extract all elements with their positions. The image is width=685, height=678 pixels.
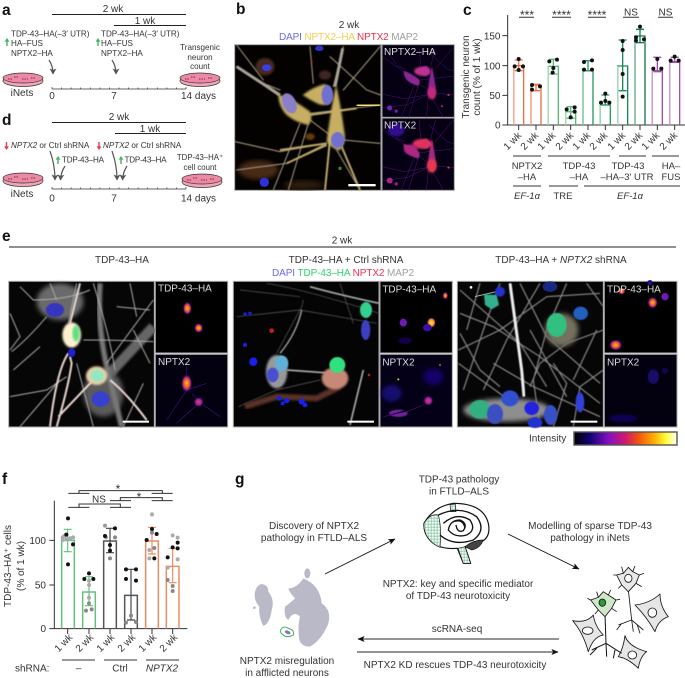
- y tick labels: 150: [484, 32, 501, 42]
- text scRNA-seq: scRNA-seq: [432, 624, 482, 635]
- NPTX2 channel: NPTX2: [384, 120, 417, 131]
- group lines and labels: [512, 156, 681, 202]
- merged micrograph 1: [9, 281, 154, 427]
- label a: a: [2, 2, 11, 19]
- panel g: summary schematic: [235, 471, 668, 678]
- shRNA row: shRNA:: [15, 664, 49, 674]
- significance text: *: [137, 490, 142, 504]
- x tick labels: 2 wk: [554, 130, 577, 153]
- arrows: [50, 151, 127, 180]
- transgene list day 7: NPTX2–HA: [101, 49, 143, 58]
- x tick labels: 1 wk: [571, 130, 594, 153]
- group lines and labels: –HA–3′ UTR: [600, 172, 654, 183]
- panel b: NPTX2-HA images: [235, 1, 454, 190]
- NPTX2-HA channel: NPTX2–HA: [384, 47, 436, 58]
- brain illustration: [424, 503, 489, 563]
- shRNA row: Ctrl: [112, 664, 128, 674]
- y tick labels: [29, 536, 46, 635]
- label b: b: [236, 1, 245, 18]
- x tick labels: 1 wk: [137, 632, 160, 655]
- x tick labels: 2 wk: [623, 130, 646, 153]
- intensity scale: Intensity: [529, 434, 566, 444]
- side channels 1: [155, 281, 228, 427]
- significance marks: ***: [520, 8, 534, 22]
- dish cell count: cell count: [184, 163, 217, 172]
- transgene list day 0: [5, 30, 90, 58]
- x tick labels: 1 wk: [95, 632, 118, 655]
- text discovery: Discovery of NPTX2: [269, 521, 359, 532]
- text mediator: [383, 579, 534, 602]
- y tick labels: 0: [40, 624, 46, 635]
- column titles: TDP-43–HA + NPTX2 shRNA: [495, 255, 627, 266]
- column titles: TDP-43–HA: [95, 255, 149, 266]
- y axis title: (% of 1 wk): [16, 541, 27, 591]
- group lines and labels: HA–: [662, 161, 681, 172]
- group lines and labels: NPTX2: [512, 161, 542, 172]
- transgene list day 0: NPTX2–HA: [11, 49, 53, 58]
- arrow to neurons: [508, 534, 579, 569]
- duration bars: 2 wk: [103, 4, 124, 15]
- channel legend: DAPI TDP-43–HA NPTX2 MAP2: [272, 268, 414, 279]
- transgene list day 7: TDP-43–HA(–3′ UTR): [101, 30, 180, 38]
- text TDP-43 pathology: in FTLD–ALS: [429, 486, 489, 498]
- label c: c: [463, 2, 472, 19]
- side channels 1: TDP-43–HA: [158, 284, 212, 295]
- y axis title: TDP-43–HA⁺ cells: [3, 525, 14, 607]
- NPTX2-HA channel: [382, 45, 454, 118]
- significance text: [92, 482, 142, 506]
- axis days: 7: [111, 194, 117, 204]
- axis days: 14 days: [181, 194, 216, 204]
- dish iNets: [3, 173, 43, 200]
- duration bars: 1 wk: [140, 124, 161, 135]
- significance text: *: [116, 482, 121, 496]
- x tick labels: 1 wk: [640, 130, 663, 153]
- x tick labels: 2 wk: [74, 632, 97, 655]
- group lines and labels: –HA: [570, 172, 589, 183]
- significance marks: NS: [624, 8, 638, 18]
- heading 2 wk: 2 wk: [339, 20, 360, 31]
- y axis title: [3, 525, 27, 607]
- panel c: transgenic neuron count chart: [461, 2, 685, 202]
- shRNA labels: NPTX2 or Ctrl shRNA: [11, 141, 90, 150]
- shRNA labels: NPTX2 or Ctrl shRNA: [103, 141, 182, 150]
- dish cell count: [177, 153, 223, 188]
- x tick labels: 1 wk: [502, 130, 525, 153]
- label g: g: [235, 471, 244, 488]
- y tick labels: 100: [29, 536, 46, 547]
- group lines and labels: FUS: [662, 172, 680, 183]
- transgene list day 0: HA–FUS: [11, 39, 44, 48]
- label d: d: [2, 112, 11, 129]
- group lines and labels: TDP-43: [612, 161, 644, 172]
- text modelling: pathology in iNets: [550, 533, 630, 544]
- significance text: NS: [92, 494, 106, 506]
- intensity scale: [529, 432, 677, 445]
- merged micrograph: [235, 45, 381, 190]
- duration bars: 1 wk: [135, 16, 156, 27]
- transgene list day 7: [96, 30, 180, 58]
- dish transgenic count: neuron: [187, 53, 213, 62]
- y axis title: Transgenic neuron: [461, 35, 472, 119]
- panel d: timeline: [2, 112, 223, 204]
- x tick labels: 2 wk: [116, 632, 139, 655]
- dish cell count: TDP-43–HA⁺: [177, 153, 223, 162]
- group lines and labels: TDP-43: [563, 161, 595, 172]
- label f: f: [2, 471, 8, 488]
- UMAP: [253, 568, 329, 647]
- x tick labels: 2 wk: [519, 130, 542, 153]
- significance marks: ****: [588, 8, 607, 22]
- TDP labels: TDP-43–HA: [62, 156, 105, 164]
- group lines and labels: TRE: [554, 191, 572, 202]
- side channels 2: NPTX2: [382, 358, 415, 369]
- group lines and labels: EF-1α: [617, 191, 644, 202]
- y tick labels: 100: [484, 62, 501, 72]
- transgene list day 7: HA–FUS: [101, 39, 134, 48]
- dish iNets: [3, 73, 43, 99]
- text modelling: Modelling of sparse TDP-43: [528, 521, 652, 532]
- side channels 3: TDP-43–HA: [607, 285, 661, 296]
- text TDP-43 pathology: [419, 474, 499, 498]
- axis days: [49, 187, 216, 204]
- text KD rescue: NPTX2 KD rescues TDP-43 neurotoxicity: [364, 660, 546, 671]
- x tick labels: 1 wk: [606, 130, 629, 153]
- heading 2 wk: 2 wk: [332, 236, 353, 246]
- y tick labels: 50: [489, 91, 501, 102]
- y tick labels: 50: [35, 580, 46, 592]
- significance marks: ****: [552, 8, 571, 22]
- text discovery: pathology in FTLD–ALS: [261, 533, 367, 544]
- side channels 2: TDP-43–HA: [382, 285, 436, 296]
- axis days: 7: [111, 91, 117, 102]
- x tick labels: 2 wk: [658, 130, 681, 153]
- channel legend: DAPI NPTX2–HA NPTX2 MAP2: [279, 32, 418, 43]
- axis days: 14 days: [181, 91, 216, 102]
- arrow scRNA-seq: [358, 638, 559, 640]
- group lines and labels: –HA: [518, 172, 537, 183]
- shRNA row: NPTX2: [146, 664, 179, 674]
- significance marks: [519, 8, 673, 22]
- neurons illustration: [573, 566, 668, 668]
- text misregulation: [240, 656, 334, 678]
- duration bars: [52, 4, 186, 27]
- bars, axes, dots: [502, 15, 685, 130]
- side channels 1: NPTX2: [158, 357, 191, 368]
- dish iNets: iNets: [11, 189, 33, 200]
- significance brackets: [68, 491, 173, 507]
- text mediator: NPTX2: key and specific mediator: [383, 579, 534, 590]
- x tick labels: 1 wk: [536, 130, 559, 153]
- y tick labels: [484, 32, 501, 132]
- duration bars: 2 wk: [109, 112, 130, 123]
- side channels 3: [604, 280, 677, 427]
- merged micrograph 2: [233, 281, 379, 427]
- NPTX2 channel: [382, 118, 454, 190]
- text discovery: [261, 521, 367, 544]
- x tick labels: 1 wk: [53, 632, 76, 655]
- column titles: TDP-43–HA + Ctrl shRNA: [289, 255, 404, 266]
- y tick labels: 0: [495, 120, 501, 132]
- text modelling: [528, 521, 652, 544]
- significance marks: NS: [659, 8, 673, 18]
- TDP labels: [56, 156, 167, 164]
- axis days: [49, 87, 216, 102]
- x tick labels: 2 wk: [588, 130, 611, 153]
- arrow to brain: [325, 539, 395, 574]
- x tick labels: [53, 632, 181, 655]
- label e: e: [2, 228, 11, 245]
- shRNA row: [15, 660, 179, 674]
- duration bars: [52, 112, 186, 135]
- axis days: 0: [49, 91, 55, 102]
- axis days: 0: [49, 194, 55, 204]
- text TDP-43 pathology: TDP-43 pathology: [419, 474, 499, 486]
- panel a: timeline: [2, 2, 220, 102]
- panel f: TDP-43-HA cell bar chart: [2, 471, 187, 674]
- column titles: [95, 255, 627, 266]
- side channels 2: [380, 281, 452, 427]
- arrows: [49, 60, 116, 74]
- shRNA labels: [4, 141, 182, 150]
- shRNA row: –: [76, 664, 82, 674]
- y axis title: count (% of 1 wk): [472, 38, 483, 116]
- bars, axes, dots: [49, 501, 187, 634]
- text mediator: of TDP-43 neurotoxicity: [406, 591, 510, 602]
- y axis title: [461, 35, 483, 119]
- TDP labels: TDP-43–HA: [124, 156, 167, 164]
- dish iNets: iNets: [11, 88, 33, 99]
- arrow KD: [357, 651, 558, 653]
- transgene list day 0: TDP-43–HA(–3′ UTR): [11, 30, 90, 38]
- merged micrograph 3: [457, 281, 603, 428]
- panel e: TDP-43 images: [2, 228, 677, 445]
- x tick labels: [502, 130, 681, 153]
- dish transgenic count: count: [190, 62, 211, 71]
- dish transgenic count: [180, 43, 220, 86]
- dish transgenic count: Transgenic: [180, 43, 220, 52]
- side channels 3: NPTX2: [607, 358, 640, 369]
- group lines and labels: EF-1α: [514, 191, 541, 202]
- text misregulation: NPTX2 misregulation: [240, 656, 334, 667]
- x tick labels: 2 wk: [158, 632, 181, 655]
